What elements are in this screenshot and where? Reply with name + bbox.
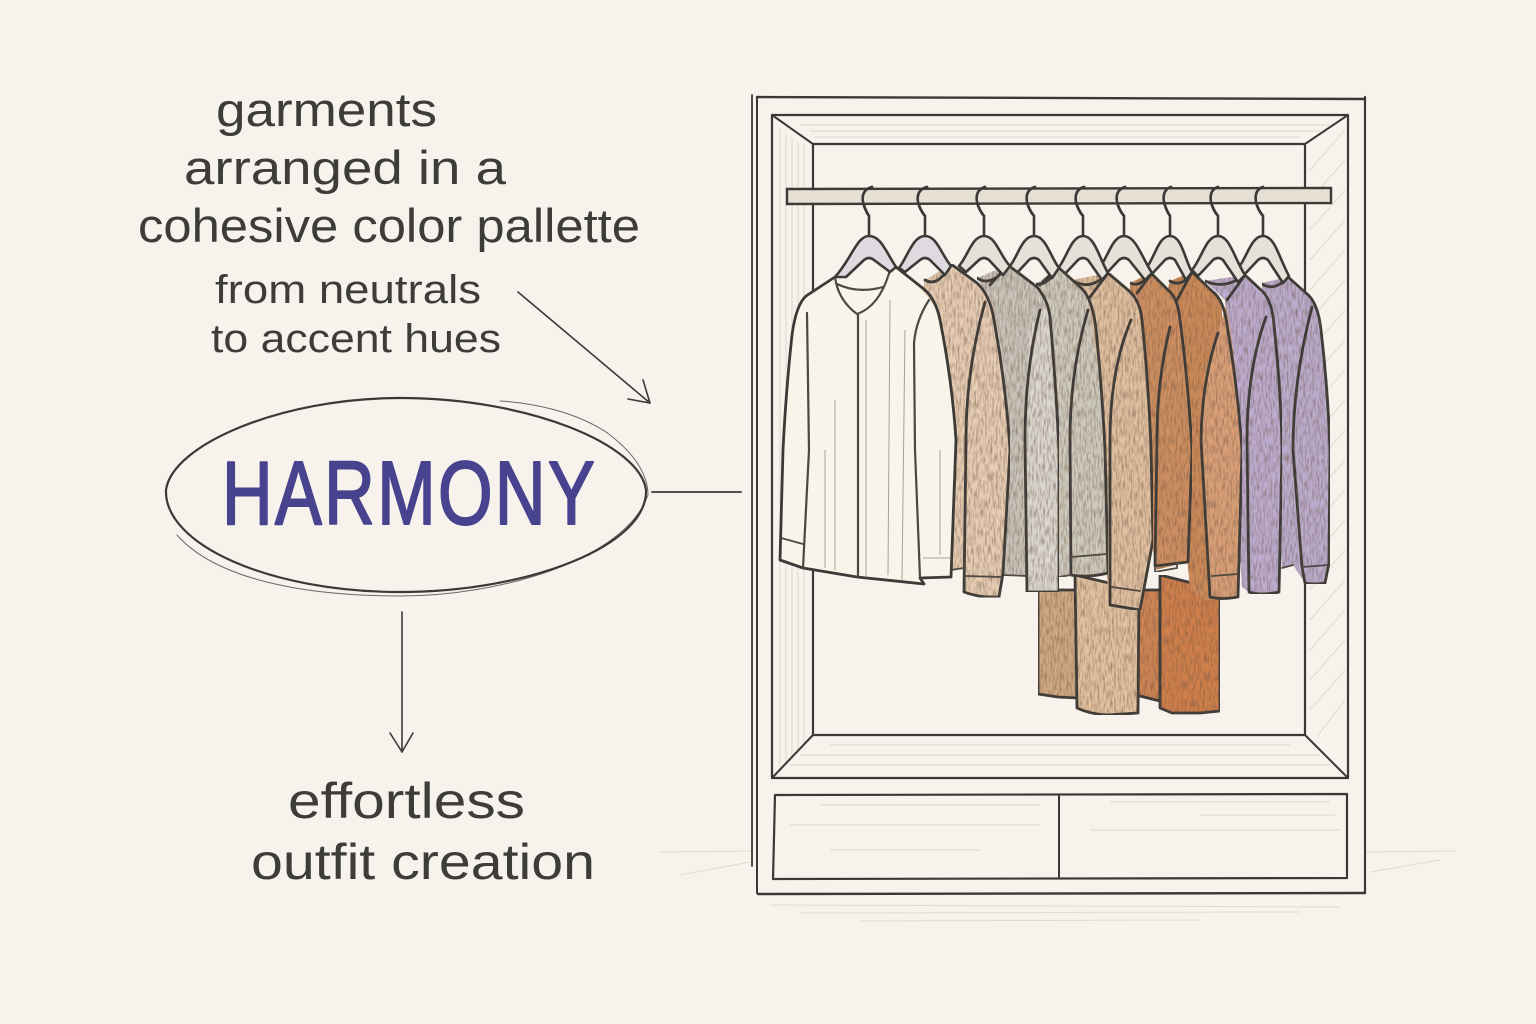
text block: effortless outfit creation: effortless bbox=[288, 773, 525, 829]
garment: sage grey bbox=[1036, 267, 1108, 577]
hanger 8 bbox=[1192, 187, 1245, 282]
garment: tan 1 bbox=[920, 264, 1010, 597]
garment: lavender 1 bbox=[1205, 275, 1282, 594]
arrow: palette note to wardrobe bbox=[518, 292, 650, 403]
text block: garments description: garments bbox=[216, 83, 437, 136]
garment: tan 2 bbox=[1072, 273, 1153, 610]
hanger 4 bbox=[1010, 187, 1059, 278]
heading: HARMONY: HARMONY bbox=[222, 444, 597, 544]
connector line to wardrobe bbox=[652, 491, 741, 493]
text block: garments description: arranged in a bbox=[184, 141, 507, 194]
garment: lavender 2 bbox=[1262, 277, 1330, 584]
hanger 5 bbox=[1057, 187, 1108, 280]
hanger 7 bbox=[1145, 187, 1192, 280]
clothes pants bbox=[1038, 575, 1220, 715]
hanger 3 bbox=[959, 187, 1010, 275]
wardrobe outer frame bbox=[752, 95, 1365, 894]
garment: warm grey bbox=[977, 265, 1059, 592]
hanger 6 bbox=[1098, 187, 1152, 280]
text block: effortless outfit creation bbox=[251, 773, 595, 890]
floor sketch lines bbox=[660, 851, 1455, 921]
wardrobe drawers bbox=[773, 794, 1347, 879]
wardrobe inner frame bbox=[772, 115, 1348, 778]
hanger 1 bbox=[835, 187, 896, 277]
text block: garments description: to accent hues bbox=[211, 317, 501, 361]
clothes rail bbox=[787, 188, 1331, 204]
ellipse: harmony bbox=[166, 398, 648, 596]
text block: garments description: from neutrals bbox=[215, 268, 481, 312]
text block: garments description bbox=[138, 83, 640, 361]
hanger 9 bbox=[1237, 187, 1289, 283]
arrow: harmony to outcome bbox=[390, 612, 413, 752]
text block: effortless outfit creation: outfit creation bbox=[251, 834, 595, 890]
wardrobe bbox=[752, 95, 1365, 894]
wardrobe side and top panel shading bbox=[780, 125, 1345, 850]
hanger hooks over rail bbox=[863, 187, 1263, 216]
garment: terracotta 1 bbox=[1130, 273, 1192, 572]
text block: garments description: cohesive color pallette bbox=[138, 199, 640, 252]
hanger 2 bbox=[899, 187, 951, 275]
garment: terracotta 2 bbox=[1165, 272, 1242, 600]
garment: cream shirt bbox=[780, 267, 956, 584]
